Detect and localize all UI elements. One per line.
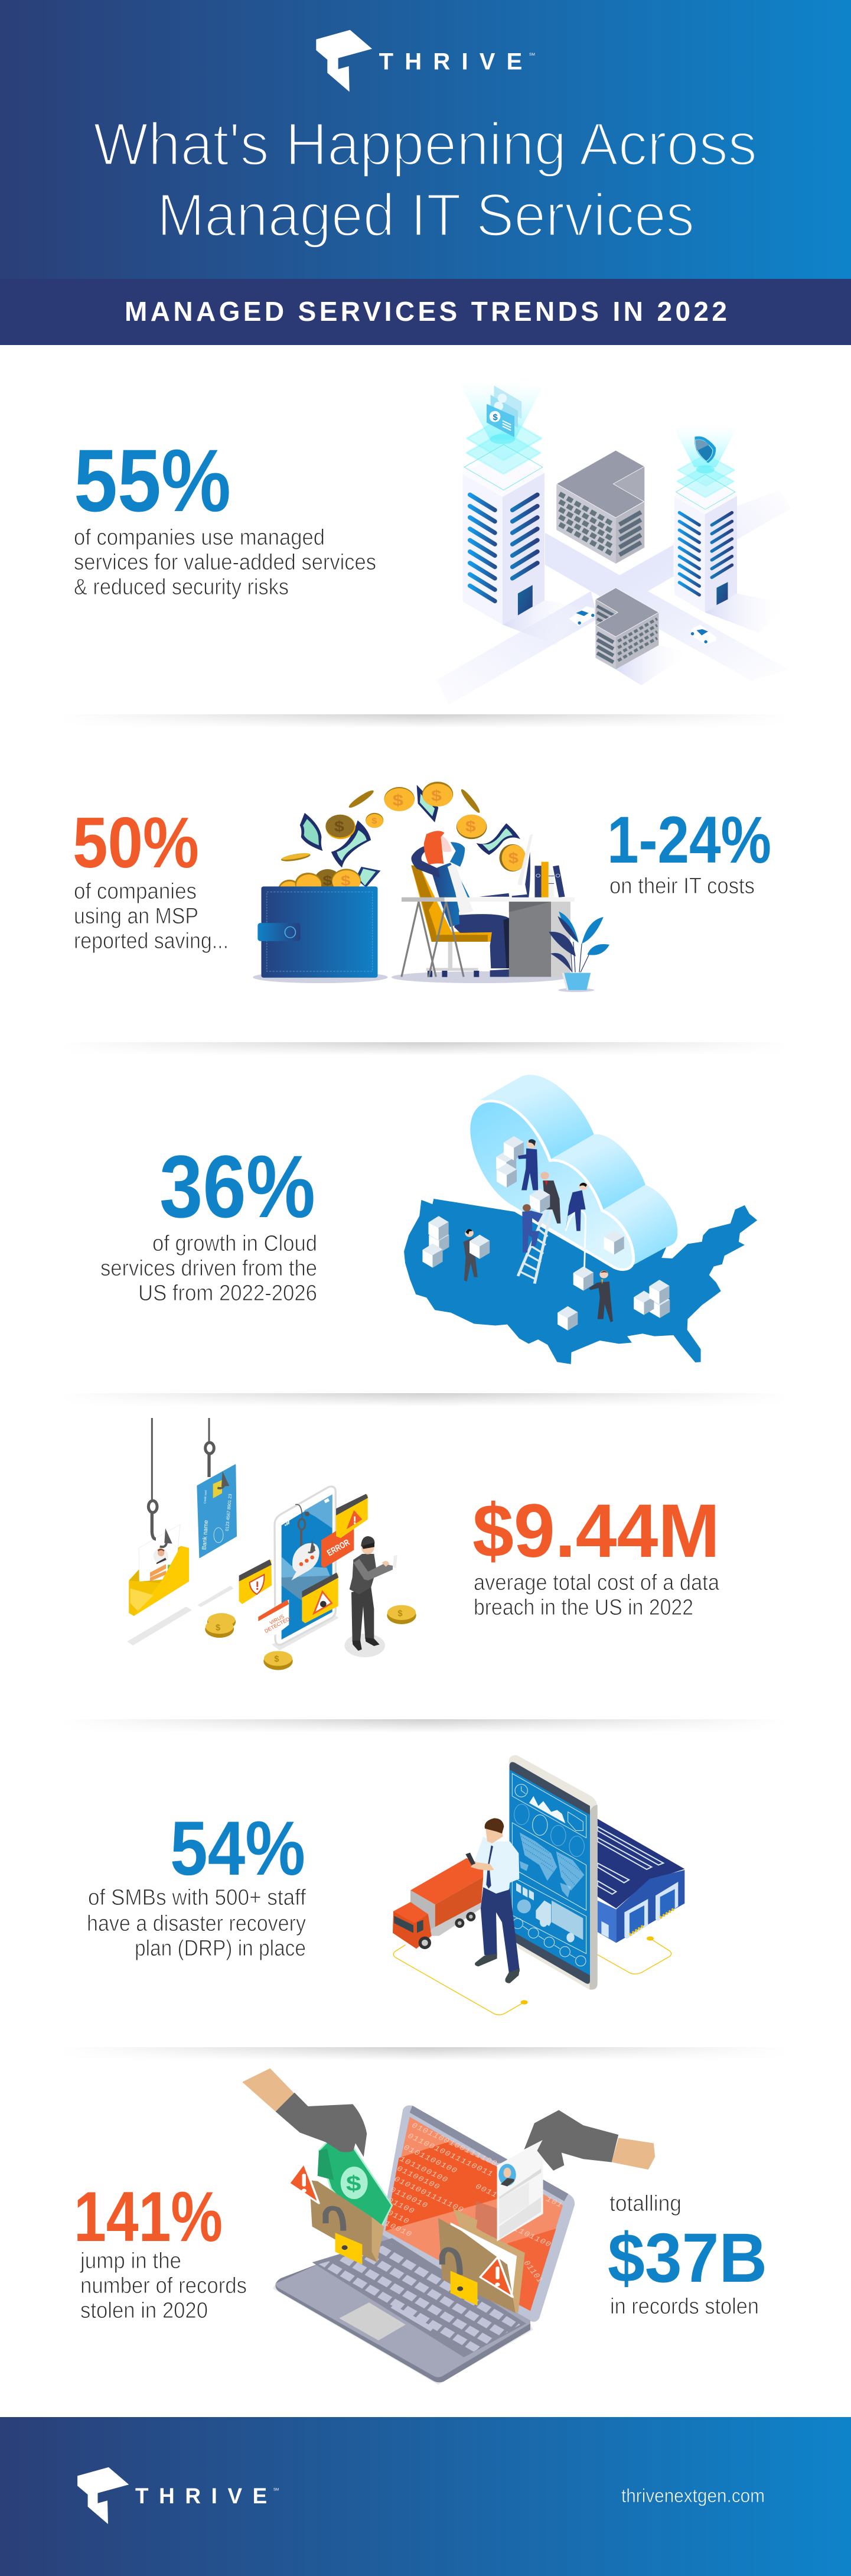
ground shadows bbox=[253, 971, 594, 992]
tower left bbox=[459, 382, 544, 625]
header banner bbox=[0, 0, 851, 279]
stat: 141%: jump in the bbox=[80, 2249, 181, 2273]
stat: 55% bbox=[74, 431, 376, 600]
footer Thrive logo bbox=[77, 2467, 279, 2524]
stat: $9.44M: breach in the US in 2022 bbox=[474, 1595, 693, 1620]
illustration: US map with cloud and workers bbox=[404, 1075, 757, 1364]
wallet with coins: $ bbox=[341, 873, 350, 889]
flying bills bbox=[300, 785, 520, 868]
stat: $37B: totalling bbox=[609, 2191, 682, 2216]
main title: Managed IT Services bbox=[157, 181, 695, 249]
alert window: virus detected bbox=[258, 1599, 292, 1641]
binary text on the screen: 1101100 bbox=[511, 2225, 553, 2249]
worker middle with box bbox=[530, 1172, 560, 1224]
stat: 50%: of companies bbox=[74, 879, 197, 904]
stat: 55%: 55% bbox=[74, 431, 231, 530]
storage cubes bbox=[422, 1136, 670, 1331]
icon: security shield bbox=[695, 437, 716, 463]
laptop lid and screen bbox=[380, 2105, 575, 2322]
hand left with glove bbox=[242, 2068, 367, 2157]
grey building front bbox=[595, 588, 658, 669]
stat: 55%: & reduced security risks bbox=[74, 575, 289, 600]
flying coins: $ bbox=[508, 850, 519, 867]
illustration: laptop data theft with gloved hands bbox=[242, 2068, 655, 2385]
illustration: phishing hooks, phone with alerts and hacker bbox=[127, 1418, 416, 1670]
worker top left bbox=[518, 1139, 538, 1190]
speech bubble bbox=[291, 1540, 319, 1580]
binary text on the screen bbox=[382, 2122, 565, 2285]
binary text on the screen: 101 bbox=[543, 2196, 565, 2210]
tower right bbox=[673, 426, 737, 612]
divider bbox=[62, 1042, 788, 1059]
alert window: ERROR bbox=[321, 1526, 354, 1568]
footer Thrive logo: SM bbox=[273, 2488, 279, 2492]
stat: $9.44M: average total cost of a data bbox=[474, 1570, 720, 1595]
binary text on the screen: 0011 bbox=[473, 2183, 500, 2200]
stolen CV document bbox=[497, 2140, 543, 2241]
stat: 55%: services for value-added services bbox=[74, 550, 376, 575]
worker with rope bbox=[565, 1182, 588, 1232]
binary text on the screen: 01101 bbox=[521, 2260, 544, 2285]
3D cloud bbox=[469, 1075, 677, 1270]
left folder, cash and padlock bbox=[289, 2128, 392, 2265]
large phone screen bbox=[509, 1755, 598, 1990]
stat: $37B: $37B bbox=[608, 2219, 767, 2297]
binary text on the screen: 01100 bbox=[385, 2197, 416, 2216]
illustration: wallet, flying money and relaxed woman at desk bbox=[253, 782, 609, 992]
alert window: warning bbox=[336, 1494, 368, 1538]
yellow connector lines bbox=[393, 1936, 671, 2015]
binary text on the screen: 0110010011110011 bbox=[405, 2132, 495, 2178]
binary text on the screen: 0101001111100 bbox=[392, 2175, 465, 2214]
Thrive logo: THRIVE bbox=[379, 48, 522, 74]
stat: 141% bbox=[74, 2177, 247, 2323]
flying coins: $ bbox=[465, 818, 476, 835]
credit card on hook: Bank name bbox=[201, 1520, 210, 1550]
worker on ladder bbox=[522, 1204, 543, 1253]
wallet with coins bbox=[257, 867, 380, 978]
ladder bbox=[518, 1201, 553, 1284]
stat: 54%: 54% bbox=[170, 1805, 305, 1891]
stat: 141%: stolen in 2020 bbox=[80, 2298, 208, 2323]
cars bbox=[569, 606, 716, 645]
credit card on hook: 0123 4567 8901 23 bbox=[224, 1494, 233, 1531]
worker receiving cube bbox=[589, 1270, 613, 1322]
alert window: shield bbox=[239, 1559, 272, 1604]
alert window: malware bbox=[302, 1573, 338, 1623]
website address: thrivenextgen.com bbox=[621, 2485, 765, 2506]
stat: $9.44M bbox=[472, 1489, 720, 1620]
stat: 36%: of growth in Cloud bbox=[152, 1231, 317, 1256]
stat: 55%: of companies use managed bbox=[74, 525, 325, 550]
alert window: virus detected: DETECTED! bbox=[263, 1615, 292, 1634]
gold coins: $ bbox=[397, 1609, 402, 1618]
flying coins: $ bbox=[334, 818, 344, 834]
flying coins: $ bbox=[431, 788, 442, 805]
hand right with glove bbox=[524, 2110, 655, 2171]
warehouse bbox=[598, 1819, 684, 1943]
fishing hook left bbox=[148, 1418, 172, 1547]
keyboard keys bbox=[319, 2243, 520, 2351]
divider bbox=[62, 1393, 788, 1410]
flying coins: $ bbox=[371, 817, 377, 826]
stat: $37B: in records stolen bbox=[610, 2294, 759, 2319]
stat: 1-24% bbox=[607, 803, 771, 899]
stat: 36%: 36% bbox=[159, 1137, 315, 1236]
hoist rope bbox=[566, 1211, 586, 1267]
stat: $9.44M: $9.44M bbox=[472, 1489, 720, 1573]
roads bbox=[437, 490, 791, 705]
gold coins bbox=[205, 1605, 416, 1670]
stat: 50%: 50% bbox=[73, 802, 199, 883]
credit card on hook bbox=[197, 1418, 236, 1557]
map of the United States bbox=[404, 1199, 757, 1364]
worker carrying cube bbox=[464, 1229, 490, 1282]
stat: 1-24%: 1-24% bbox=[607, 803, 771, 877]
alert window: ERROR: ERROR bbox=[325, 1538, 351, 1558]
divider bbox=[62, 714, 788, 731]
credit card on hook: Credit card bbox=[203, 1490, 207, 1504]
flying coins bbox=[281, 782, 526, 871]
desk and chair bbox=[411, 866, 570, 977]
stat: 36%: services driven from the bbox=[100, 1256, 317, 1281]
stat: 50%: using an MSP bbox=[74, 904, 198, 929]
stat: 36% bbox=[100, 1137, 317, 1306]
envelope with ID card on hook bbox=[129, 1524, 189, 1616]
subtitle band: MANAGED SERVICES TRENDS IN 2022 bbox=[125, 296, 727, 327]
stat: 1-24%: on their IT costs bbox=[609, 874, 755, 899]
stat: 54%: of SMBs with 500+ staff bbox=[88, 1885, 306, 1910]
illustration: isometric city with managed services towers bbox=[437, 382, 791, 705]
binary text on the screen: 101100100 bbox=[397, 2156, 450, 2184]
potted plant bbox=[549, 912, 609, 990]
warehouse doors bbox=[601, 1882, 678, 1939]
binary text on the screen: 01011001001111001 bbox=[409, 2122, 504, 2171]
binary text on the screen: 0110010 bbox=[387, 2186, 430, 2210]
monitor, keyboard and binders bbox=[402, 834, 575, 977]
stat: 141%: 141% bbox=[74, 2177, 223, 2256]
flying coins: $ bbox=[393, 792, 403, 809]
right folder, documents and padlock bbox=[438, 2209, 525, 2313]
Thrive logo bbox=[316, 30, 535, 92]
stat: 54%: plan (DRP) in place bbox=[135, 1936, 306, 1961]
footer banner bbox=[0, 2417, 851, 2576]
stat: 50%: reported saving... bbox=[74, 929, 229, 954]
smartphone bbox=[275, 1487, 335, 1645]
subtitle band bbox=[0, 279, 851, 345]
main title: What's Happening Across bbox=[93, 110, 757, 178]
stat: $37B bbox=[608, 2191, 767, 2319]
alert window: virus detected: VIRUS bbox=[269, 1613, 285, 1626]
stat: 54%: have a disaster recovery bbox=[87, 1911, 306, 1936]
gold coins: $ bbox=[274, 1655, 279, 1664]
binary text on the screen: 01100100 bbox=[394, 2165, 442, 2191]
footer Thrive logo: THRIVE bbox=[135, 2484, 267, 2508]
stat: 36%: US from 2022-2026 bbox=[138, 1281, 317, 1306]
floor strips bbox=[127, 1586, 338, 1650]
laptop base bbox=[273, 2235, 533, 2385]
business man bbox=[465, 1818, 520, 1983]
stat: 50% bbox=[73, 802, 229, 954]
icon: invoice cards: $ bbox=[493, 413, 498, 422]
binary text on the screen: 0101100100 bbox=[401, 2144, 459, 2175]
grey building back bbox=[556, 450, 644, 564]
divider bbox=[62, 2047, 788, 2064]
divider bbox=[62, 1719, 788, 1736]
stat: 141%: number of records bbox=[80, 2273, 247, 2298]
hacker bbox=[344, 1536, 397, 1657]
left folder, cash and padlock: $ bbox=[346, 2172, 361, 2196]
truck bbox=[393, 1858, 483, 1949]
gold coins: $ bbox=[216, 1623, 220, 1632]
Thrive logo: SM bbox=[529, 53, 535, 57]
icon: invoice cards bbox=[487, 386, 521, 437]
stat: 54% bbox=[87, 1805, 306, 1961]
main title bbox=[93, 110, 757, 249]
woman bbox=[411, 831, 509, 977]
wallet with coins: $ bbox=[322, 873, 332, 889]
binary text on the screen: 10010 bbox=[382, 2220, 414, 2239]
illustration: truck, warehouse and logistics phone with business man bbox=[393, 1755, 684, 2015]
binary text on the screen: 0110 bbox=[385, 2210, 411, 2226]
